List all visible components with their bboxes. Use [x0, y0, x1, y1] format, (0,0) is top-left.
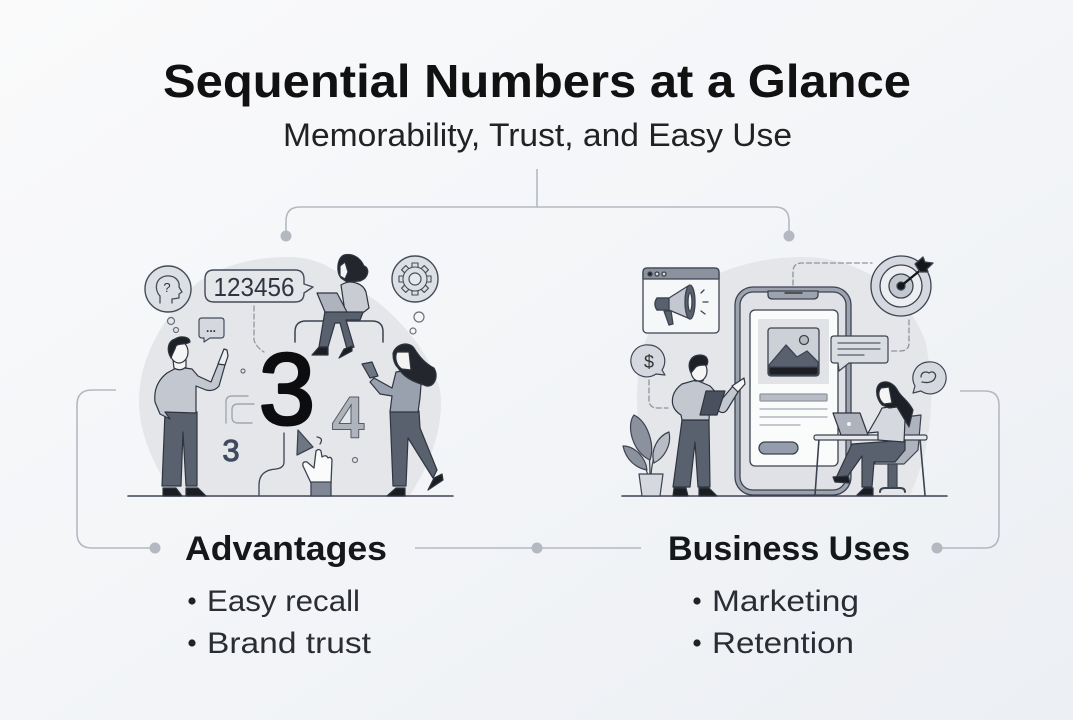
cursor and hand	[259, 430, 332, 496]
list: business uses	[693, 585, 859, 660]
number speech bubble: 123456	[214, 274, 294, 302]
heading: business uses: Business Uses	[668, 530, 910, 568]
blob background	[637, 257, 931, 495]
person: man with tablet	[672, 355, 745, 496]
person: woman with laptop	[312, 254, 369, 358]
bench	[295, 321, 383, 342]
list: advantages	[188, 585, 372, 660]
person: woman at laptop	[833, 382, 913, 495]
title: Sequential Numbers at a Glance	[163, 55, 911, 107]
heading: advantages: Advantages	[185, 530, 387, 568]
big number three: 3	[259, 334, 315, 446]
icon: head with question mark: ?	[163, 280, 171, 295]
bracket shapes	[226, 396, 254, 423]
connector: left bracket	[77, 390, 160, 554]
icon: head with question mark	[145, 266, 191, 312]
connector: middle link	[415, 542, 641, 554]
browser window with megaphone	[643, 268, 719, 333]
icon: target with arrow	[871, 256, 933, 316]
chat bubble: ...	[206, 321, 216, 335]
phone image placeholder	[768, 328, 819, 376]
bubbles	[168, 312, 424, 462]
dashed links	[649, 263, 909, 408]
list: advantages: Easy recall	[207, 585, 360, 618]
person: man pointing	[155, 337, 228, 496]
blob background	[139, 257, 441, 495]
outlined number four: 4	[332, 385, 365, 451]
number speech bubble	[205, 270, 313, 302]
chat bubble	[199, 318, 224, 342]
list: business uses: Marketing	[712, 585, 859, 618]
subtitle: Memorability, Trust, and Easy Use	[283, 117, 792, 153]
small number three: 3	[222, 433, 240, 468]
connector: right bracket	[932, 391, 999, 554]
icon: gear	[392, 256, 438, 302]
speech bubble: heart	[913, 362, 946, 394]
speech bubble: text	[831, 336, 888, 371]
desk and chair	[814, 415, 927, 495]
speech bubble: dollar: $	[644, 352, 654, 372]
person: woman with phone	[362, 344, 443, 496]
speech bubble: dollar	[631, 345, 665, 377]
phone	[735, 287, 851, 495]
illustration: business uses	[622, 256, 947, 496]
illustration: advantages	[128, 254, 453, 496]
list: business uses: Retention	[712, 627, 854, 660]
connector: top tree	[280, 169, 794, 242]
ground line	[622, 495, 947, 497]
ground line	[128, 495, 453, 497]
list: advantages: Brand trust	[207, 627, 372, 660]
dashed link	[254, 306, 264, 352]
plant	[623, 415, 670, 496]
